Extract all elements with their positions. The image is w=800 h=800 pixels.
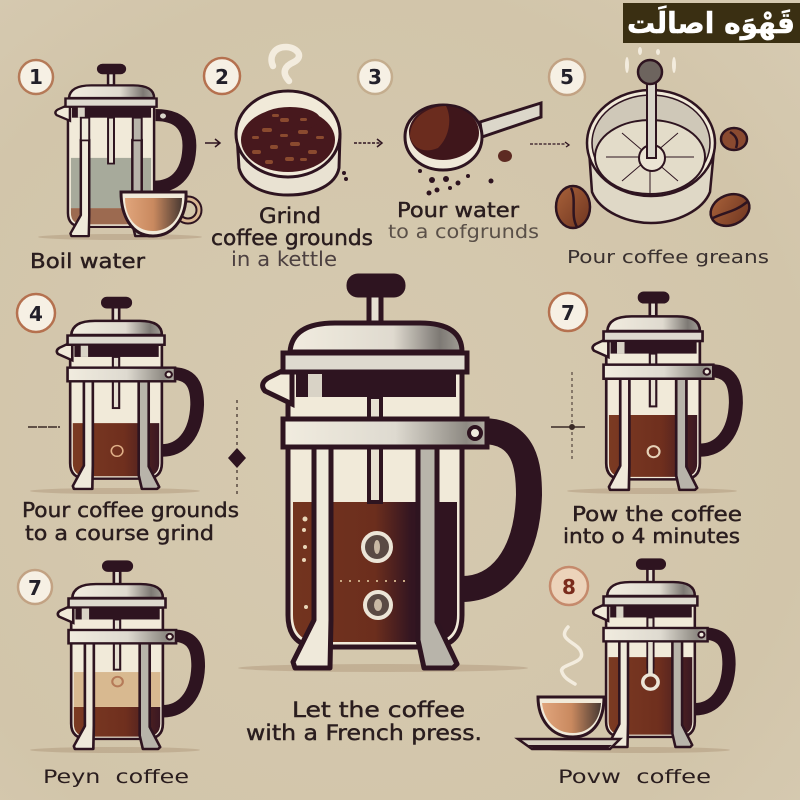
dotted marker with diamond — [228, 400, 246, 498]
french press — [593, 293, 736, 490]
number badge 2: 2 — [215, 65, 229, 89]
label: Pour water — [397, 198, 520, 222]
number badge 7: 7 — [561, 301, 575, 325]
number badge 4 — [17, 294, 55, 332]
number badge 4: 4 — [29, 302, 43, 326]
bean window upper — [363, 533, 391, 561]
ground shadow — [30, 488, 200, 494]
dashed arrow — [354, 139, 382, 147]
ground shadow — [567, 488, 737, 494]
number badge 7: 7 — [28, 576, 42, 600]
crosshair marker — [551, 372, 585, 460]
number badge 5: 5 — [560, 65, 574, 89]
cup and saucer — [518, 697, 620, 750]
number badge 1: 1 — [29, 65, 43, 89]
number badge 3 — [358, 60, 392, 94]
label: Povw coffee — [558, 766, 711, 788]
french press with water — [55, 65, 189, 236]
step 3: pour water — [358, 60, 541, 243]
step 7 lower: bloom — [18, 562, 200, 788]
bean and spilled grounds — [418, 150, 512, 196]
step 1: boil water — [19, 60, 202, 273]
label — [246, 698, 482, 745]
ground shadow — [238, 664, 528, 672]
label: Pour coffee greans — [567, 247, 769, 268]
number badge 2 — [204, 58, 240, 94]
dashed arrow — [530, 142, 569, 147]
label — [563, 502, 742, 548]
step 4: pour coffee grounds — [17, 294, 239, 545]
bean window lower — [365, 592, 391, 618]
step 2: grind — [204, 47, 373, 271]
step 5: plunger filter — [549, 47, 769, 268]
french press — [57, 298, 197, 489]
step 7: steep — [549, 293, 742, 548]
arrow — [205, 139, 220, 147]
filter basket — [587, 60, 715, 223]
label — [22, 498, 239, 545]
label: Grind — [259, 204, 321, 228]
label — [211, 204, 373, 271]
label: into o 4 minutes — [563, 524, 740, 548]
label: Pour coffee grounds — [22, 498, 239, 522]
label: Boil water — [30, 249, 146, 273]
number badge 8: 8 — [562, 575, 576, 599]
number badge 8 — [550, 567, 588, 605]
large french press — [263, 276, 529, 668]
title banner: قَهْوَه اصالَت — [627, 6, 795, 40]
label: to a course grind — [25, 521, 214, 545]
number badge 1 — [19, 60, 53, 94]
spilled grounds — [342, 171, 348, 181]
label: Let the coffee — [292, 698, 465, 722]
steam — [272, 47, 299, 81]
label: in a kettle — [231, 247, 337, 271]
ground shadow — [38, 234, 202, 240]
french press — [593, 560, 729, 747]
label — [388, 198, 539, 243]
bowl of coffee grounds — [236, 91, 340, 195]
steam — [562, 627, 582, 684]
coffee beans — [556, 128, 754, 231]
number badge 7 — [18, 570, 52, 604]
bubbles — [302, 516, 412, 609]
coffee cup — [121, 192, 199, 236]
dashed mark — [28, 426, 60, 428]
ground shadow — [30, 747, 200, 753]
french press — [58, 562, 198, 749]
number badge 5 — [549, 59, 585, 95]
sparkles — [625, 47, 676, 73]
number badge 3: 3 — [368, 65, 382, 89]
label: to a cofgrunds — [388, 221, 539, 243]
label: Pow the coffee — [572, 502, 742, 526]
number badge 7 — [549, 293, 587, 331]
step 8: serve — [518, 560, 730, 788]
label: with a French press. — [246, 721, 482, 745]
label: Peyn coffee — [43, 766, 189, 788]
label: coffee grounds — [211, 226, 373, 250]
coffee scoop — [405, 103, 541, 170]
center step: large french press — [238, 276, 529, 745]
ground shadow — [550, 747, 730, 753]
